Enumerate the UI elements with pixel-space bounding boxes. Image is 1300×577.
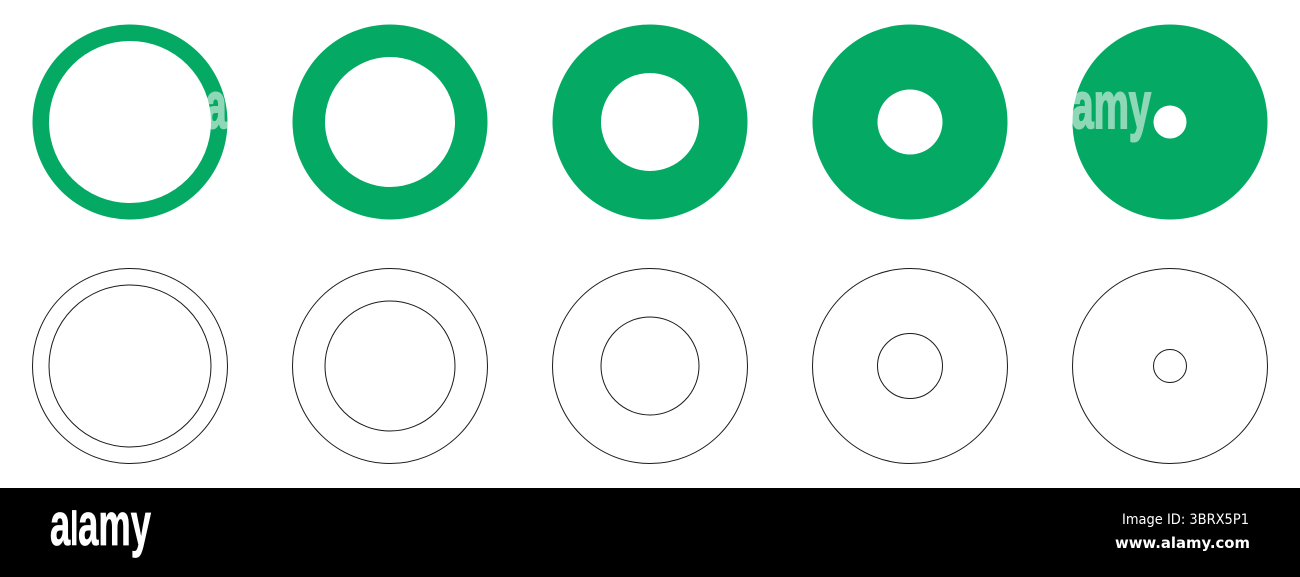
watermark: right ring: alamy [1041,68,1151,142]
green ring 4 [812,25,1008,220]
outline ring 1 [32,268,228,464]
image id: Image ID: 3BRX5P1 [1122,512,1249,528]
footer logo: alamy [50,491,151,558]
green ring 2 [292,25,488,220]
outline ring 4 [812,268,1008,464]
outline ring 2 [292,268,488,464]
green ring 5 [1072,25,1268,220]
row: outline rings [32,268,1268,464]
row: filled green rings [32,25,1268,220]
green ring 1 [32,25,228,220]
watermark: left ring: alamy [205,68,315,142]
green ring 3 [552,25,748,220]
website: www.alamy.com [1115,534,1250,552]
footer bar [0,488,1300,577]
outline ring 5 [1072,268,1268,464]
outline ring 3 [552,268,748,464]
